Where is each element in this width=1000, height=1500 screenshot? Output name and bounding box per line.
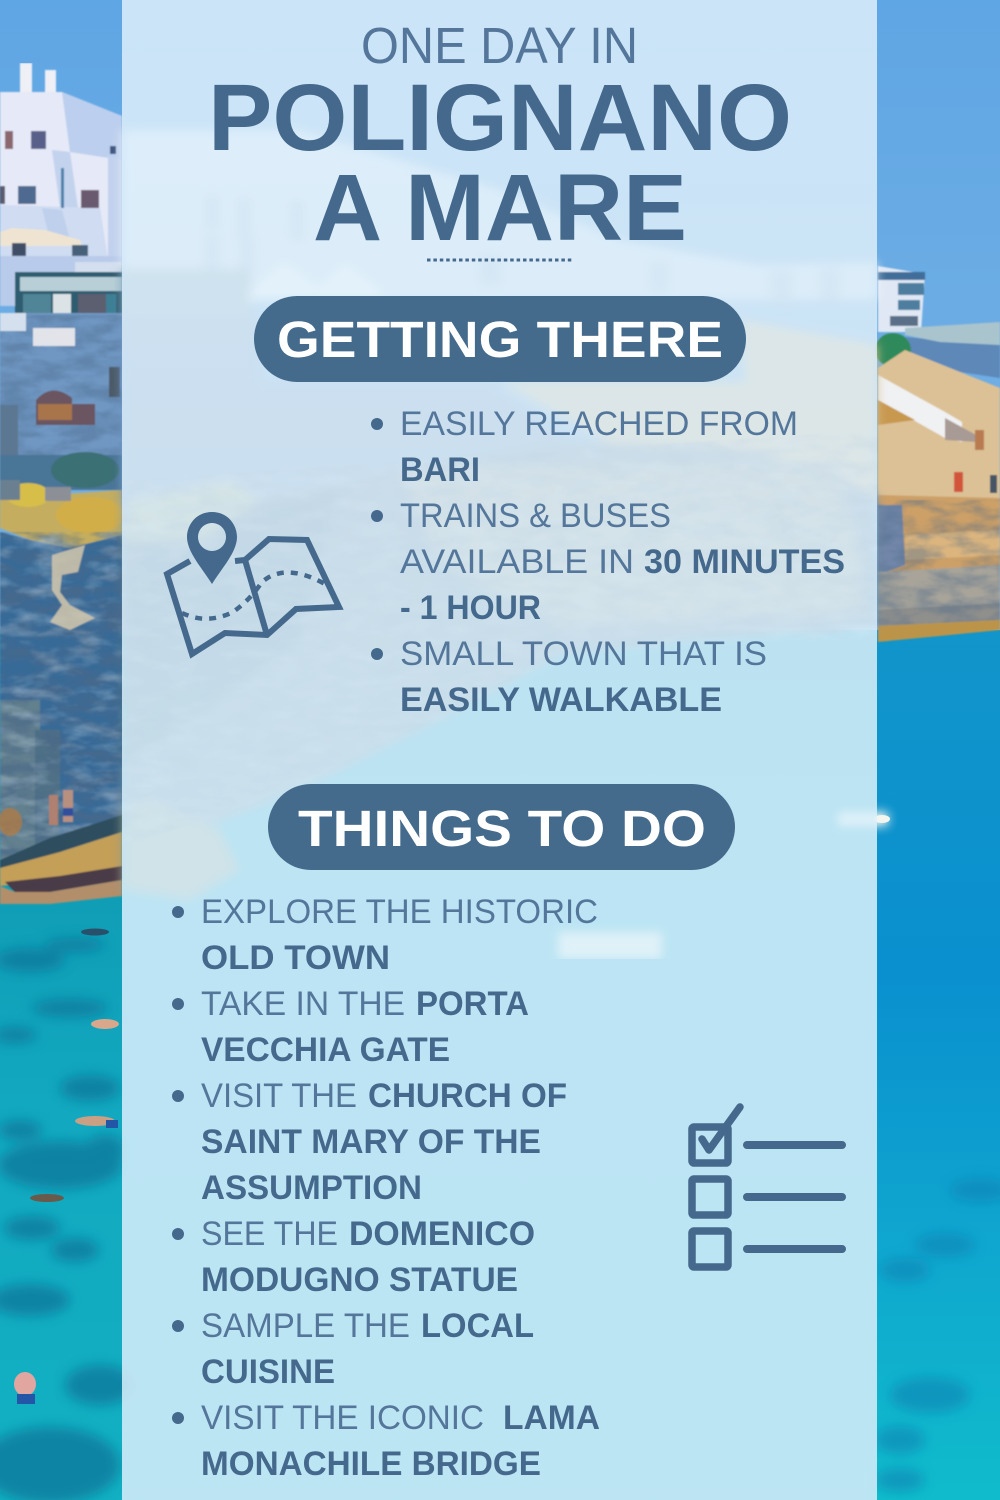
list: getting there: EASILY REACHED FROM — [400, 405, 798, 443]
swimmers — [14, 815, 890, 1404]
list: things to do: VISIT THE ICONIC — [201, 1399, 484, 1437]
list: things to do: VECCHIA GATE — [201, 1031, 450, 1069]
list: getting there: 30 MINUTES — [644, 543, 845, 581]
people on ledge — [49, 795, 58, 825]
heading pill: getting there — [254, 296, 746, 382]
list: things to do: VISIT THE — [201, 1077, 357, 1115]
list: things to do: LAMA — [503, 1399, 600, 1437]
right hillside — [878, 350, 1000, 505]
list: things to do: SAMPLE THE — [201, 1307, 410, 1345]
translucent centre panel — [122, 0, 877, 1500]
left stone wall — [0, 313, 122, 488]
list: getting there: EASILY WALKABLE — [400, 681, 722, 719]
list: things to do: TAKE IN THE — [201, 985, 405, 1023]
icon: map with location pin — [167, 512, 339, 654]
list: getting there: TRAINS & BUSES — [400, 497, 671, 535]
list: things to do: CHURCH OF — [368, 1077, 567, 1115]
left cliff — [0, 532, 122, 860]
list: things to do: EXPLORE THE HISTORIC — [201, 893, 598, 931]
heading pill: getting there: GETTING THERE — [277, 311, 723, 368]
list: things to do: SAINT MARY OF THE — [201, 1123, 541, 1161]
sea — [0, 630, 1000, 1500]
left building — [0, 63, 122, 330]
list: getting there: SMALL TOWN THAT IS — [400, 635, 767, 673]
list: things to do: MODUGNO STATUE — [201, 1261, 518, 1299]
list: getting there: - 1 HOUR — [400, 589, 541, 627]
right bush — [875, 333, 911, 367]
heading pill: things to do: THINGS TO DO — [298, 800, 706, 857]
heading pill: things to do — [268, 784, 735, 870]
list: getting there: BARI — [400, 451, 480, 489]
title: POLIGNANO — [208, 65, 792, 171]
title — [208, 17, 792, 261]
title: A MARE — [313, 155, 687, 261]
list: things to do: LOCAL — [421, 1307, 534, 1345]
dotted divider — [427, 258, 574, 262]
list: things to do: OLD TOWN — [201, 939, 390, 977]
list: things to do: PORTA — [416, 985, 529, 1023]
list: things to do: ASSUMPTION — [201, 1169, 422, 1207]
icon: checklist — [692, 1107, 842, 1267]
list: getting there: AVAILABLE IN — [400, 543, 634, 581]
list: things to do: CUISINE — [201, 1353, 335, 1391]
right cliff — [878, 495, 1000, 640]
list: getting there — [371, 405, 845, 719]
right building — [878, 266, 925, 332]
list: things to do: SEE THE — [201, 1215, 338, 1253]
title: ONE DAY IN — [361, 17, 638, 74]
list: things to do: MONACHILE BRIDGE — [201, 1445, 541, 1483]
right far wall — [905, 337, 1000, 378]
scene hidden behind panel — [122, 130, 888, 959]
left cliff base — [0, 815, 122, 870]
left vegetation — [51, 452, 119, 488]
list: things to do: DOMENICO — [349, 1215, 535, 1253]
list: things to do — [172, 893, 600, 1483]
